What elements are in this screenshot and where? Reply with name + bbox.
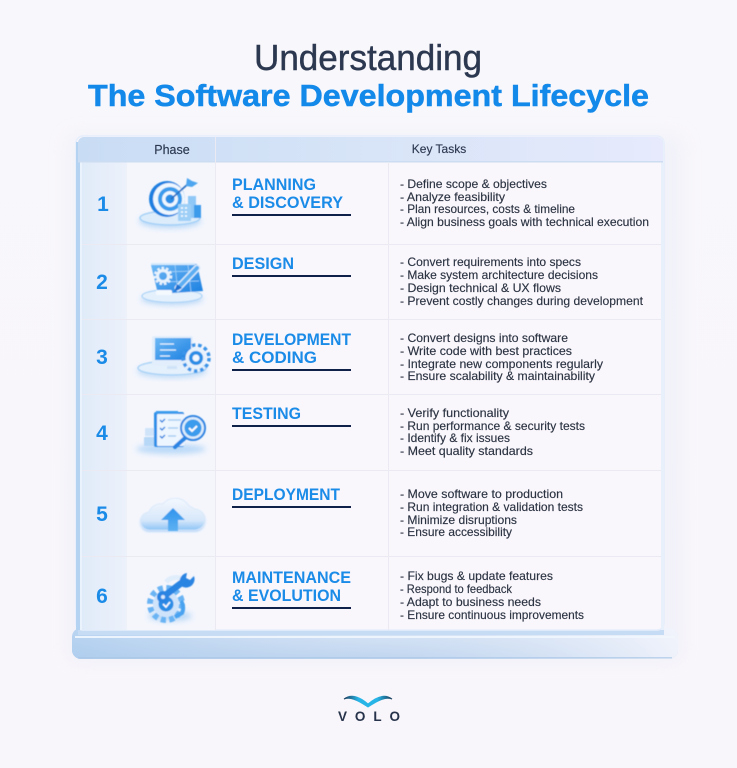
left edge xyxy=(76,142,81,630)
title line: The Software Development Lifecycle: The Software Development Lifecycle xyxy=(88,78,649,113)
tasks xyxy=(400,255,644,308)
icon: wrench and gears xyxy=(148,573,195,621)
tasks xyxy=(400,177,649,229)
tasks xyxy=(400,487,583,539)
icon: blueprint and pencil xyxy=(141,264,203,305)
row 6: maintenance and evolution xyxy=(96,569,584,622)
number 4: 4 xyxy=(96,422,108,445)
tasks xyxy=(400,331,603,383)
tasks: - Ensure continuous improvements xyxy=(400,608,584,622)
tasks: - Align business goals with technical execution xyxy=(400,215,649,229)
tasks: - Meet quality standards xyxy=(400,444,533,458)
icon: cloud upload xyxy=(140,498,205,532)
tasks: - Convert requirements into specs xyxy=(400,255,581,269)
icon: checklist and magnifier xyxy=(136,411,206,454)
row 2: design xyxy=(96,255,644,308)
table panel xyxy=(76,136,664,630)
tasks: - Integrate new components regularly xyxy=(400,357,603,371)
icon column xyxy=(127,162,215,630)
tasks xyxy=(400,406,585,458)
heading: TESTING xyxy=(232,405,301,423)
tasks: - Run integration & validation tests xyxy=(400,500,583,514)
title xyxy=(88,37,649,113)
tasks: - Design technical & UX flows xyxy=(400,281,561,295)
table header xyxy=(78,137,663,162)
logo wordmark: VOLO xyxy=(338,709,400,724)
row 1: planning and discovery: & DISCOVERY xyxy=(232,194,343,212)
tasks xyxy=(400,569,584,622)
tasks: - Ensure accessibility xyxy=(400,525,512,539)
table header: Key Tasks xyxy=(412,142,466,156)
row 3: development and coding: & CODING xyxy=(232,349,317,367)
tasks: - Verify functionality xyxy=(400,406,509,420)
tasks: - Fix bugs & update features xyxy=(400,569,553,583)
number 1: 1 xyxy=(97,193,109,216)
row 3: development and coding xyxy=(96,331,603,383)
tasks: - Analyze feasibility xyxy=(400,190,505,204)
heading: DEPLOYMENT xyxy=(232,486,340,504)
number 6: 6 xyxy=(96,585,108,608)
icon: target with arrow and buildings xyxy=(139,178,201,228)
row 4: testing xyxy=(96,405,585,458)
tasks: - Convert designs into software xyxy=(400,331,568,345)
heading: DEVELOPMENT xyxy=(232,331,351,349)
tasks: - Plan resources, costs & timeline xyxy=(400,202,575,216)
title line: Understanding: Understanding xyxy=(254,37,482,78)
tasks: - Write code with best practices xyxy=(400,344,572,358)
row 5: deployment xyxy=(96,486,583,539)
heading: PLANNING xyxy=(232,176,316,194)
tasks: - Ensure scalability & maintainability xyxy=(400,369,595,383)
tasks: - Identify & fix issues xyxy=(400,431,510,445)
number 3: 3 xyxy=(96,346,108,369)
tasks: - Respond to feedback xyxy=(400,582,513,596)
number 5: 5 xyxy=(96,503,108,526)
tasks: - Make system architecture decisions xyxy=(400,268,598,282)
tasks: - Minimize disruptions xyxy=(400,513,517,527)
table header: Phase xyxy=(154,143,190,157)
tasks: - Adapt to business needs xyxy=(400,595,541,609)
number 2: 2 xyxy=(96,271,108,294)
logo mark xyxy=(344,696,392,707)
table stand base xyxy=(72,628,678,659)
right edge xyxy=(661,140,664,630)
tasks: - Move software to production xyxy=(400,487,563,501)
number column xyxy=(82,162,127,630)
heading: DESIGN xyxy=(232,255,294,273)
heading: MAINTENANCE xyxy=(232,569,351,587)
tasks: - Run performance & security tests xyxy=(400,419,585,433)
icon: monitor and gear xyxy=(137,336,209,378)
row 6: maintenance and evolution: & EVOLUTION xyxy=(232,587,341,605)
tasks: - Define scope & objectives xyxy=(400,177,547,191)
row 1: planning and discovery xyxy=(97,176,649,229)
logo: Volo xyxy=(338,696,400,724)
tasks: - Prevent costly changes during development xyxy=(400,294,644,308)
